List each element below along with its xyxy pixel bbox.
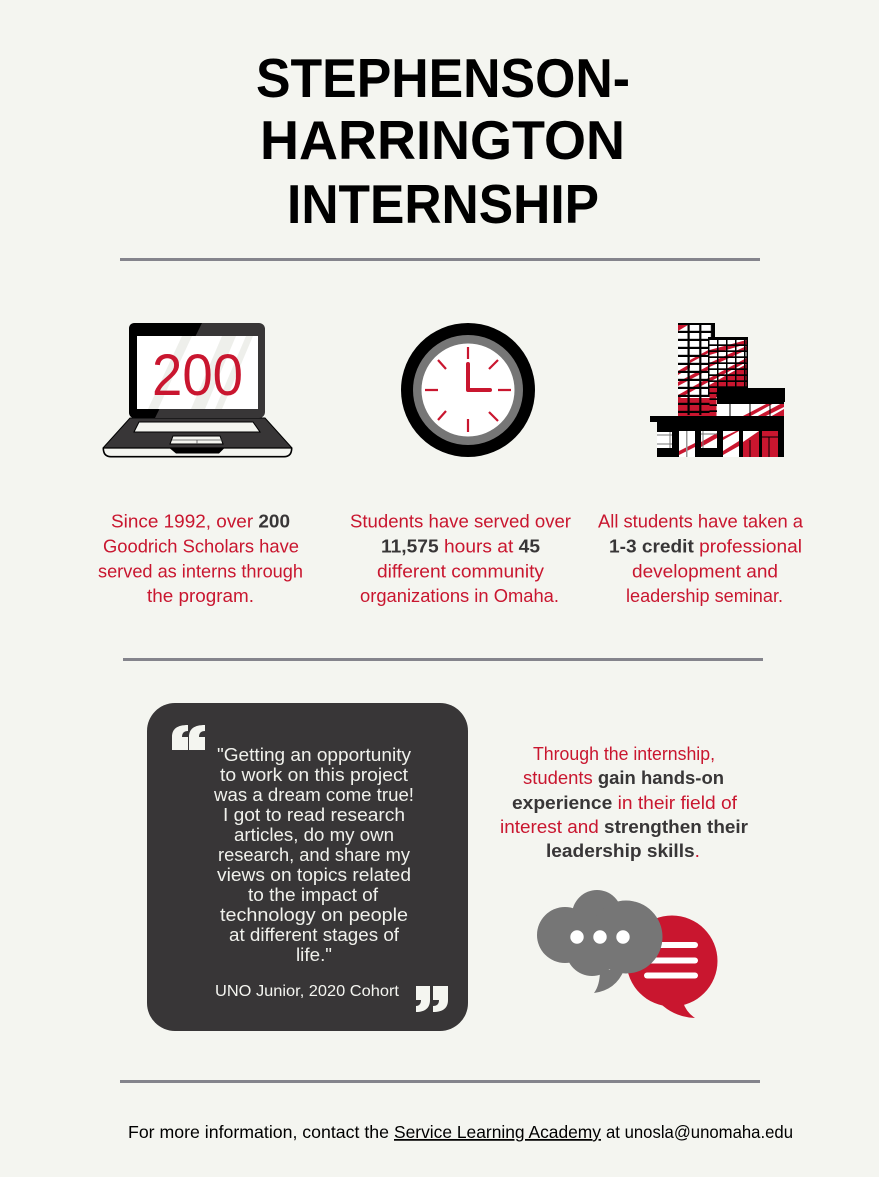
- text block: hours served: Students have served over: [350, 510, 571, 532]
- text block: 200 scholars: the program.: [147, 585, 254, 606]
- quote text: to the impact of: [248, 884, 379, 905]
- quote text: research, and share my: [218, 844, 411, 865]
- text block: seminar: [598, 510, 804, 606]
- text block: hours served: [350, 510, 571, 606]
- footer contact line: at unosla@unomaha.edu: [606, 1122, 793, 1142]
- number on laptop: 200: [152, 343, 243, 408]
- text block: seminar: development and: [632, 560, 778, 582]
- title: [256, 47, 630, 235]
- quote text: articles, do my own: [234, 824, 394, 845]
- text block: seminar: 1-3 credit professional: [609, 536, 802, 556]
- footer contact line: For more information, contact the: [128, 1122, 389, 1142]
- text block: hands-on experience: experience in their field of: [512, 793, 738, 813]
- quote text: technology on people: [220, 904, 408, 925]
- text block: 200 scholars: served as interns through: [98, 560, 303, 582]
- icon: opening quote mark: [172, 725, 205, 750]
- quote text: was a dream come true!: [213, 784, 414, 805]
- title: INTERNSHIP: [287, 173, 599, 235]
- icon: laptop showing 200: [103, 323, 292, 457]
- text block: 200 scholars: Since 1992, over 200: [111, 510, 290, 532]
- quote text: to work on this project: [220, 764, 408, 785]
- icon: clock: [401, 323, 535, 457]
- quote text: life.": [296, 944, 332, 965]
- text block: hands-on experience: Through the internship,: [533, 744, 715, 764]
- icon: closing quote mark: [416, 986, 448, 1012]
- title: STEPHENSON-: [256, 47, 630, 109]
- text block: seminar: leadership seminar.: [626, 585, 783, 606]
- title: HARRINGTON: [260, 109, 625, 171]
- icon: building: [650, 323, 785, 457]
- quote attribution: UNO Junior, 2020 Cohort: [215, 983, 400, 1000]
- quote text: [213, 744, 414, 965]
- quote text: I got to read research: [223, 804, 405, 825]
- footer contact line: [128, 1122, 793, 1142]
- icon: speech bubbles: [537, 890, 718, 1018]
- text block: hands-on experience: students gain hands-on: [523, 768, 724, 788]
- text block: hands-on experience: interest and strengthen their: [500, 817, 748, 837]
- text block: 200 scholars: [98, 510, 303, 606]
- panel: student quote: [147, 703, 468, 1031]
- text block: hours served: organizations in Omaha.: [360, 585, 559, 606]
- quote text: at different stages of: [229, 924, 400, 945]
- text block: 200 scholars: Goodrich Scholars have: [103, 536, 299, 556]
- footer contact line: Service Learning Academy: [394, 1122, 601, 1142]
- quote text: views on topics related: [217, 864, 411, 885]
- text block: hours served: different community: [377, 560, 545, 582]
- text block: hands-on experience: leadership skills .: [546, 841, 700, 861]
- quote text: "Getting an opportunity: [217, 744, 412, 765]
- text block: hours served: 11,575 hours at 45: [381, 536, 540, 556]
- text block: hands-on experience: [500, 744, 748, 861]
- text block: seminar: All students have taken a: [598, 510, 804, 532]
